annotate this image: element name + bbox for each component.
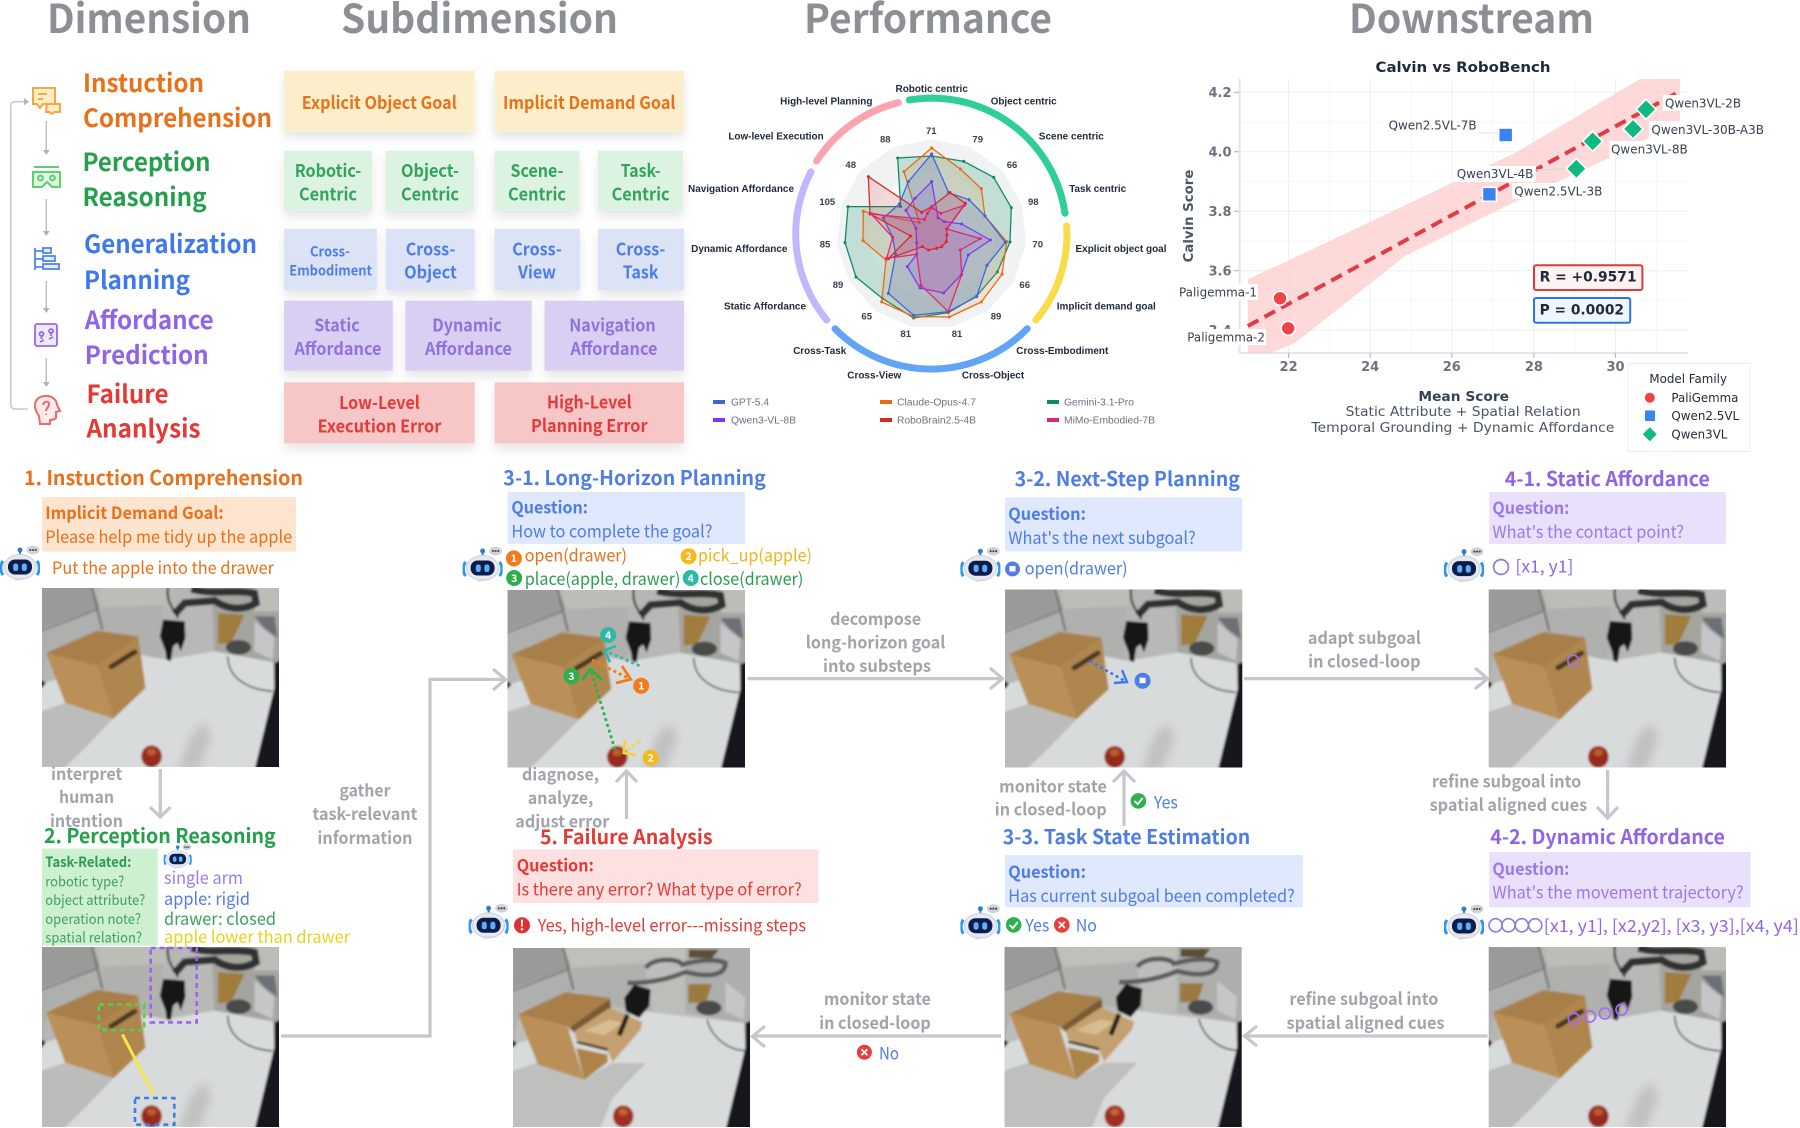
annotation: monitor state closed-loop: monitor state <box>999 772 1107 797</box>
answer options <box>1006 911 1097 936</box>
label: Failure Ananlysis: Failure <box>86 375 168 411</box>
tick labels: 22 <box>1280 360 1298 375</box>
question box <box>1005 498 1242 552</box>
box: Task-Centric: Centric <box>612 182 670 207</box>
annotation: refine subgoal: spatial aligned cues <box>1286 1009 1444 1034</box>
point labels: Qwen3VL-8B <box>1611 142 1688 156</box>
radar category labels: Low-level Execution <box>728 132 824 143</box>
annotation: adapt subgoal: adapt subgoal <box>1308 624 1421 649</box>
tick labels: 4.0 <box>1208 146 1232 160</box>
question box: What's the movement trajectory? <box>1492 878 1744 904</box>
answer: [x1, y1] <box>1515 552 1573 578</box>
radar axis values: 70 <box>1032 240 1043 251</box>
chart: Calvin vs RoboBench scatter <box>1177 60 1766 452</box>
subgoal list: open(drawer) <box>525 541 627 566</box>
step heading: 4-2. Dynamic Affordance <box>1490 821 1725 850</box>
icon: robot <box>961 547 1000 582</box>
photo with planned subgoal arrows: 2 <box>648 751 654 766</box>
chart: performance radar <box>688 84 1167 426</box>
radar category labels: Cross-View <box>847 370 902 381</box>
panel: 1. Instuction Comprehension <box>1 462 303 832</box>
label: Perception Reasoning <box>82 143 210 214</box>
box: Cross-Object: Object <box>404 260 457 285</box>
radar category labels: High-level Planning <box>780 96 872 107</box>
loop arrow from failure analysis back to instruction <box>11 98 29 409</box>
question box <box>1489 492 1726 544</box>
dimension labels <box>82 64 272 446</box>
box: Cross-Object: Cross- <box>406 236 455 261</box>
annotation: gather task-relevant information: information <box>318 824 412 849</box>
status: Yes <box>1131 789 1178 814</box>
box: Scene-Centric: Scene- <box>510 158 564 183</box>
point labels <box>1177 95 1766 345</box>
icon: robot <box>463 547 502 582</box>
label: Affordance Prediction <box>84 301 214 372</box>
scatter legend: Qwen3VL <box>1671 428 1728 442</box>
grid lines and axes <box>1234 79 1688 358</box>
task-related box: object attribute? <box>45 890 145 910</box>
answer options: No <box>1076 911 1097 936</box>
question box: Question: <box>1008 500 1086 525</box>
label: Instuction Comprehension: Comprehension <box>83 99 272 135</box>
box: Task-Centric <box>598 151 683 211</box>
panel: 5. Failure Analysis <box>469 821 931 1128</box>
task-related box: Task-Related: <box>45 852 131 872</box>
step heading: 5. Failure Analysis <box>540 821 713 850</box>
answer options: Yes <box>1024 911 1049 936</box>
answer: open(drawer) <box>1025 555 1128 580</box>
label: Failure Ananlysis <box>86 375 200 446</box>
column headers <box>47 0 1594 45</box>
icon: robot <box>469 904 508 939</box>
photo with planned subgoal arrows: 3 <box>568 669 575 684</box>
x axis title <box>1310 389 1614 436</box>
radar category labels: Cross-Embodiment <box>1016 346 1109 357</box>
stat box: R value <box>1534 265 1642 290</box>
annotation: gather task-relevant information <box>312 777 418 849</box>
annotation: monitor state <box>819 985 931 1034</box>
arrow: task state up to next-step <box>1113 771 1135 826</box>
perception answers <box>164 864 350 948</box>
stat box: R value: R = +0.9571 <box>1540 270 1637 286</box>
box: Object-Centric: Object- <box>401 158 459 183</box>
perception answers: drawer: closed <box>164 905 276 930</box>
box: Object-Centric: Centric <box>401 182 459 207</box>
point labels: Qwen3VL-4B <box>1457 167 1533 181</box>
box: Cross-Task <box>598 229 684 290</box>
x axis title: Temporal Grounding + Dynamic Affordance <box>1310 420 1614 436</box>
icon: robot <box>1445 905 1483 940</box>
box: Static Affordance: Static <box>314 312 360 337</box>
annotation: interpret human intention: intention <box>50 807 123 832</box>
step heading: 1. Instuction Comprehension <box>24 462 303 491</box>
tick labels: 28 <box>1525 360 1543 375</box>
annotation: interpret human intention: interpret <box>51 760 122 785</box>
annotation: monitor state closed-loop <box>995 772 1107 820</box>
icon: robot <box>961 904 1000 940</box>
annotation: diagnose, analyze, adjust error: analyze, <box>528 784 593 809</box>
point labels: Qwen3VL-2B <box>1665 96 1741 110</box>
subgoal list: 2 <box>685 549 692 564</box>
panel: 3-3. Task State Estimation <box>961 821 1444 1128</box>
box: High-Level Planning Error: Planning Error <box>531 413 648 438</box>
question box: Has current subgoal been completed? <box>1008 882 1295 907</box>
photo with planned subgoal arrows: 4 <box>605 628 611 643</box>
stat box: P value: P = 0.0002 <box>1540 302 1624 318</box>
radar plot polygons <box>837 139 1026 327</box>
radar category labels <box>688 84 1167 381</box>
radar category labels: Scene centric <box>1039 132 1104 143</box>
point labels: Paligemma-2 <box>1187 330 1265 344</box>
step heading: 2. Perception Reasoning <box>44 820 276 849</box>
step heading: 3-1. Long-Horizon Planning <box>503 462 766 491</box>
panel: 3-2. Next-Step Planning <box>961 463 1421 820</box>
box: Cross-Object <box>386 229 475 290</box>
answer: [x1, y1], [x2,y2], [x3, y3],[x4, y4] <box>1544 912 1799 937</box>
question box <box>1005 855 1303 907</box>
scatter legend: PaliGemma <box>1671 391 1738 405</box>
workflow connector arrows <box>150 668 1618 1047</box>
icon: robot <box>164 844 191 869</box>
radar axis values: 89 <box>833 280 843 291</box>
photo: scene <box>39 585 282 770</box>
box: Cross-View: Cross- <box>512 236 562 261</box>
box: Explicit Object Goal: Explicit Object Goal <box>302 90 457 115</box>
arrow: perception to planning <box>43 199 50 236</box>
subgoal list <box>506 541 812 590</box>
photo: open drawer scene <box>510 945 753 1128</box>
question box: Question: <box>511 494 588 519</box>
box: Dynamic Affordance: Dynamic <box>432 312 502 337</box>
radar category labels: Static Affordance <box>724 301 806 312</box>
photo with planned subgoal arrows: 1 <box>638 679 644 694</box>
label: Perception Reasoning: Reasoning <box>82 178 207 214</box>
radar legend: GPT-5.4 <box>731 398 769 408</box>
point labels: Paligemma-1 <box>1179 286 1257 300</box>
question box: Question: <box>1008 858 1086 883</box>
radar axis values: 85 <box>820 240 831 251</box>
answer: ! <box>519 916 525 936</box>
radar axis values: 88 <box>880 135 891 146</box>
box: Robotic-Centric <box>284 151 372 211</box>
subgoal list: 3 <box>511 571 517 586</box>
tick labels: 3.8 <box>1208 205 1232 220</box>
scatter legend <box>1628 364 1750 452</box>
annotation: adapt subgoal <box>1308 624 1421 672</box>
label: Instuction Comprehension <box>83 64 272 135</box>
radar category labels: Cross-Object <box>962 370 1025 381</box>
label: Generalization Planning: Generalization <box>84 225 257 261</box>
panel: dimension flow icons <box>11 88 60 424</box>
status: No: No <box>879 1040 899 1064</box>
subgoal list: close(drawer) <box>700 565 803 590</box>
stat box: P value <box>1534 298 1630 323</box>
icon: chat bubbles <box>33 88 60 114</box>
subgoal list: place(apple, drawer) <box>525 565 680 590</box>
label: Generalization Planning <box>84 225 257 297</box>
label: Affordance Prediction: Affordance <box>84 301 214 337</box>
radar legend: Qwen3-VL-8B <box>731 416 796 426</box>
radar category labels: Task centric <box>1069 184 1126 195</box>
radar axis values <box>819 126 1043 340</box>
panel: subdimension boxes <box>284 71 684 443</box>
step heading: 3-3. Task State Estimation <box>1003 821 1250 850</box>
question box <box>508 492 745 544</box>
radar axis values: 81 <box>952 329 963 340</box>
photo with contact point <box>1485 586 1729 771</box>
confidence band <box>1248 79 1680 353</box>
radar legend: Claude-Opus-4.7 <box>897 398 976 408</box>
box: Cross-View <box>495 229 580 290</box>
radar axis values: 105 <box>819 197 836 208</box>
arrow: instruction to perception <box>43 121 50 155</box>
photo with trajectory points <box>1485 944 1729 1128</box>
box: Scene-Centric: Centric <box>508 182 566 207</box>
box: Cross-Embodiment <box>284 229 377 290</box>
annotation: refine subgoal: refine subgoal into <box>1432 768 1581 793</box>
annotation: refine subgoal <box>1430 768 1587 816</box>
arrow: planning to next-step <box>748 668 1002 689</box>
panel: 4-2. Dynamic Affordance <box>1445 821 1799 1128</box>
subgoal list: pick_up(apple) <box>698 541 812 566</box>
answer: Put the apple into the drawer <box>52 554 274 579</box>
annotation: gather task-relevant information: gather <box>340 777 391 802</box>
box: Implicit Demand Goal <box>495 71 684 132</box>
annotation: diagnose, analyze, adjust error: adjust error <box>515 807 610 832</box>
annotation: gather task-relevant information: task-relevant <box>312 800 418 825</box>
label: Failure Ananlysis: Ananlysis <box>86 410 200 446</box>
task-related box: robotic type? <box>45 871 124 891</box>
perception answers: apple: rigid <box>164 885 250 910</box>
arrow: planning to affordance <box>43 281 50 313</box>
perception answers: apple lower than drawer <box>164 923 350 948</box>
icon: robot <box>1 546 39 581</box>
annotation: diagnose, analyze, adjust error <box>515 760 610 832</box>
point labels: Qwen2.5VL-3B <box>1514 184 1602 198</box>
radar category labels: Object centric <box>991 96 1057 107</box>
arrow: affordance to failure <box>43 358 50 387</box>
radar axis values: 48 <box>845 160 856 171</box>
photo with perception overlays <box>39 944 282 1128</box>
annotation: monitor state: in closed-loop <box>819 1009 931 1034</box>
x axis title: Static Attribute + Spatial Relation <box>1346 404 1581 420</box>
arrow: failure analysis up to planning <box>616 771 637 819</box>
box: Robotic-Centric: Robotic- <box>295 158 361 183</box>
annotation: refine subgoal: refine subgoal into <box>1289 985 1438 1010</box>
question box: Please help me tidy up the apple <box>45 523 292 548</box>
question box <box>1489 852 1751 907</box>
arrow: task state to failure analysis <box>752 1026 1001 1047</box>
arrow: static to dynamic affordance <box>1597 770 1618 818</box>
annotation: refine subgoal <box>1286 985 1444 1034</box>
annotation: adapt subgoal: in closed-loop <box>1308 648 1421 672</box>
question box: Question: <box>1492 855 1569 880</box>
radar category labels: Navigation Affordance <box>688 184 794 195</box>
radar legend <box>713 398 1155 426</box>
annotation: decompose long-horizon goal: into substeps <box>823 652 931 677</box>
box: Task-Centric: Task- <box>621 158 661 183</box>
annotation: interpret human intention <box>50 760 123 832</box>
annotation: decompose long-horizon goal: long-horizon goal <box>806 628 945 653</box>
annotation: monitor state: monitor state <box>824 985 931 1010</box>
arrow: perception to long-horizon planning <box>281 669 506 1036</box>
perception answers: single arm <box>164 864 243 889</box>
icon: hierarchy <box>35 248 59 270</box>
photo with planned subgoal arrows <box>504 587 748 771</box>
box: Low-Level Execution Error <box>284 382 475 443</box>
tick labels: 26 <box>1443 360 1461 375</box>
panel: 4-1. Static Affordance <box>1430 463 1729 816</box>
photo: open drawer scene <box>1001 944 1245 1128</box>
question box: How to complete the goal? <box>511 518 712 543</box>
icon: robot <box>1445 547 1483 583</box>
tick labels: 3.6 <box>1208 264 1232 280</box>
annotation: decompose long-horizon goal: decompose <box>830 605 921 630</box>
annotation: monitor state closed-loop: in closed-loop <box>995 795 1107 820</box>
status: No <box>857 1040 899 1064</box>
box: Explicit Object Goal <box>284 71 475 132</box>
regression line <box>1248 92 1679 326</box>
axis label: Calvin Score: Calvin Score <box>1181 170 1197 262</box>
radar category labels: Dynamic Affordance <box>691 244 788 255</box>
data points <box>1273 99 1656 335</box>
label: Affordance Prediction: Prediction <box>85 336 209 372</box>
question box <box>513 849 818 903</box>
arrow: instruction to perception <box>150 769 170 817</box>
box: Low-Level Execution Error: Execution Error <box>318 413 442 438</box>
box: Navigation Affordance: Navigation <box>569 312 656 337</box>
box: Scene-Centric <box>495 151 580 211</box>
radar axis values: 71 <box>926 126 937 137</box>
icon: affordance map <box>35 324 57 346</box>
tick labels: 24 <box>1361 360 1379 375</box>
radar category labels: Cross-Task <box>793 346 846 357</box>
answer: Yes, high-level error---missing steps <box>537 911 806 936</box>
box: High-Level Planning Error <box>495 382 684 443</box>
radar axis values: 81 <box>900 329 912 340</box>
box: Static Affordance <box>284 301 393 371</box>
radar axis values: 98 <box>1028 197 1039 208</box>
box: Cross-Embodiment: Embodiment <box>289 260 372 280</box>
box: Dynamic Affordance: Affordance <box>424 336 512 361</box>
question box: Implicit Demand Goal: <box>45 499 224 524</box>
annotation: refine subgoal: spatial aligned cues <box>1430 791 1587 816</box>
icon: head with question mark <box>35 396 60 424</box>
label: Instuction Comprehension: Instuction <box>83 64 204 100</box>
panel: 2. Perception Reasoning <box>39 777 418 1128</box>
box: Cross-Task: Cross- <box>616 236 665 261</box>
box: Static Affordance: Affordance <box>294 336 382 361</box>
radar legend: MiMo-Embodied-7B <box>1064 416 1155 426</box>
box: Cross-View: View <box>517 260 556 285</box>
label: Generalization Planning: Planning <box>84 261 190 297</box>
box: Cross-Task: Task <box>623 260 659 285</box>
radar axis values: 66 <box>1007 160 1017 171</box>
point labels: Qwen3VL-30B-A3B <box>1651 123 1764 137</box>
radar axis values: 89 <box>991 311 1001 322</box>
box: Object-Centric <box>386 151 474 211</box>
radar category labels: Robotic centric <box>896 84 968 95</box>
tick labels: 30 <box>1606 360 1625 375</box>
task-related box <box>42 849 158 948</box>
task-related box: operation note? <box>45 909 141 929</box>
question box: What's the contact point? <box>1492 518 1684 543</box>
icon: VR goggles <box>33 167 60 187</box>
label: Perception Reasoning: Perception <box>82 143 210 179</box>
radar legend: RoboBrain2.5-4B <box>897 416 976 426</box>
arrow: dynamic affordance to task state <box>1244 1026 1488 1046</box>
radar axis values: 79 <box>972 135 983 146</box>
radar axis values: 65 <box>861 311 873 322</box>
tick labels <box>1208 86 1625 375</box>
box: Dynamic Affordance <box>405 301 532 371</box>
scatter legend: Model Family <box>1649 372 1727 386</box>
box: Navigation Affordance: Affordance <box>570 336 658 361</box>
task-related box: spatial relation? <box>45 928 142 948</box>
tick labels: 3.4 <box>1208 324 1232 339</box>
tick labels: 4.2 <box>1208 86 1232 101</box>
question box: Question: <box>517 852 594 877</box>
subgoal list: 1 <box>511 551 517 566</box>
question box: Is there any error? What type of error? <box>517 876 802 900</box>
box: High-Level Planning Error: High-Level <box>547 390 632 415</box>
box: Implicit Demand Goal: Implicit Demand Goal <box>503 90 676 115</box>
x axis title: Mean Score <box>1418 389 1509 405</box>
step heading: 4-1. Static Affordance <box>1505 463 1710 492</box>
box: Low-Level Execution Error: Low-Level <box>339 390 420 415</box>
question box: What's the next subgoal? <box>1008 524 1196 549</box>
step heading: 3-2. Next-Step Planning <box>1015 463 1240 492</box>
panel: 3-1. Long-Horizon Planning <box>463 462 945 832</box>
annotation: diagnose, analyze, adjust error: diagnose, <box>522 760 599 785</box>
scatter legend: Qwen2.5VL <box>1671 409 1740 423</box>
annotation: interpret human intention: human <box>59 783 114 808</box>
chart title: Calvin vs RoboBench <box>1376 60 1550 76</box>
radar legend: Gemini-3.1-Pro <box>1064 398 1134 408</box>
radar category labels: Explicit object goal <box>1076 244 1167 255</box>
box: Navigation Affordance <box>545 301 684 371</box>
box: Cross-Embodiment: Cross- <box>310 242 350 262</box>
annotation: decompose long-horizon goal <box>806 605 945 677</box>
arrow: next-step to static affordance <box>1244 668 1488 689</box>
point labels: Qwen2.5VL-7B <box>1389 118 1477 132</box>
photo with next subgoal arrow <box>1002 586 1246 771</box>
radar category labels: Implicit demand goal <box>1057 301 1156 312</box>
subgoal list: 4 <box>688 571 694 586</box>
radar axis values: 66 <box>1019 280 1030 291</box>
radar category arcs <box>796 98 1067 369</box>
question box <box>42 497 296 552</box>
question box: Question: <box>1492 494 1569 519</box>
box: Robotic-Centric: Centric <box>299 182 357 207</box>
status: Yes: Yes <box>1153 789 1178 814</box>
